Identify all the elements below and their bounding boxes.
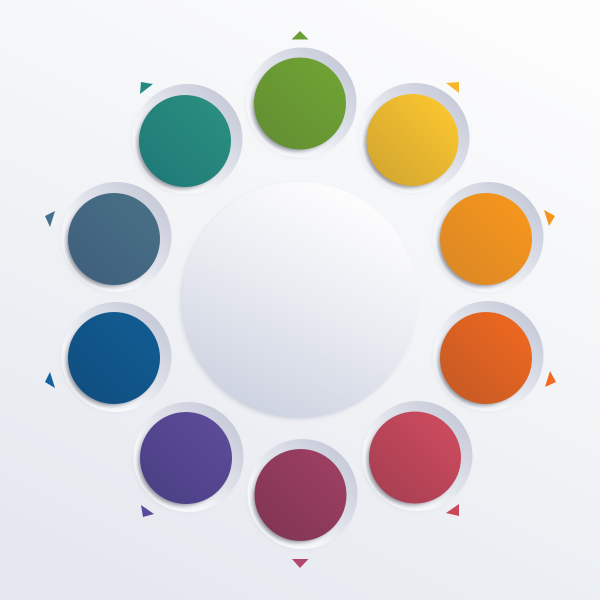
arrow: maroon [292,559,308,568]
segment: red-orange circle [432,301,544,412]
arrow: slate [45,211,55,227]
arrow: orange [544,210,555,226]
arrow: purple [141,505,154,517]
segment: green circle [246,48,356,158]
segment: orange circle [432,182,544,293]
arrow: blue [45,372,55,388]
segment: purple circle [132,402,244,513]
arrow: crimson [446,504,459,516]
segment: slate circle [60,182,172,293]
arrow: red-orange [545,371,556,387]
center circle [180,182,418,419]
segment: teal circle [132,84,242,195]
arrow: green [292,31,308,40]
arrow: teal [140,82,153,94]
segment: blue circle [60,302,172,413]
segment: crimson circle [362,401,472,512]
arrow: yellow [446,82,459,93]
segment: maroon circle [246,439,358,550]
segment: yellow circle [358,83,470,194]
